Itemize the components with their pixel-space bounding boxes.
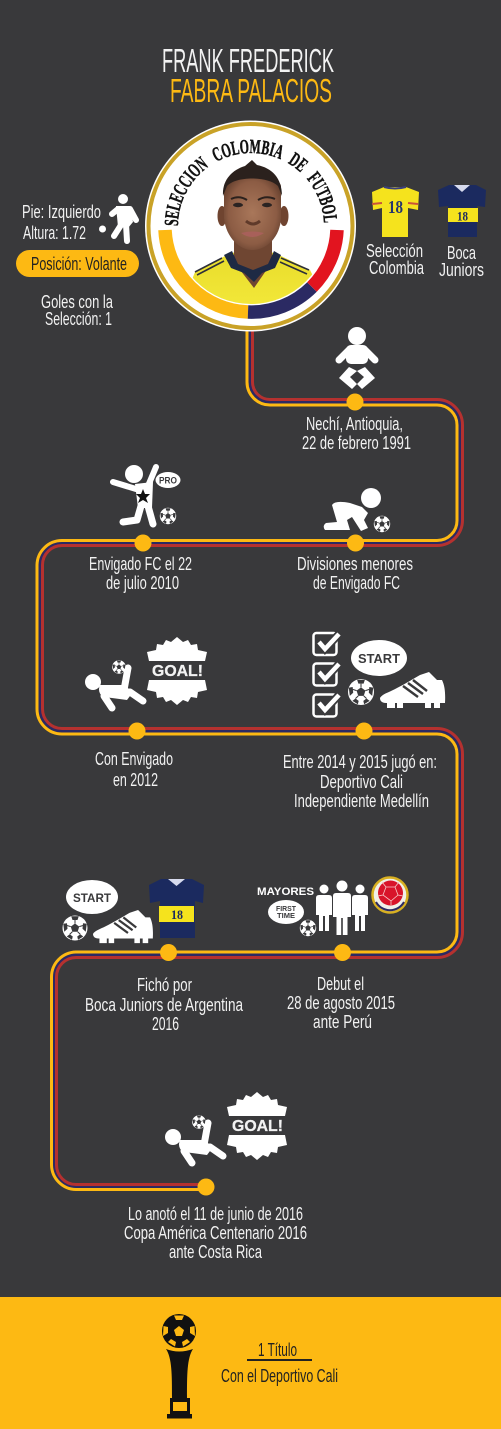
milestone dots [128, 394, 372, 1196]
portrait [192, 160, 312, 304]
text: Envigado FC: de julio 2010 [106, 573, 179, 593]
text: birth: Nechí, Antioquia, [306, 414, 403, 434]
text: birth: 22 de febrero 1991 [302, 433, 411, 453]
goals with national team: Selección: 1 [45, 309, 112, 329]
icon: crawling baby [324, 488, 390, 532]
badge text: SELECCION COLOMBIA DE FUTBOL [164, 140, 338, 226]
text: Divisiones menores: de Envigado FC [313, 573, 400, 593]
text: 2014 to 2015: Deportivo Cali [320, 772, 403, 792]
icon: start, ball, boot and Boca shirt: 18 [171, 907, 183, 922]
text: Divisiones menores [297, 554, 413, 593]
text: Copa América goal [124, 1204, 307, 1262]
icon: baby [339, 327, 375, 389]
icon: pro player [113, 465, 180, 524]
icon: senior team debut: FIRST [276, 906, 297, 913]
goals with national team: Goles con la [41, 292, 114, 312]
player stats: Pie: Izquierdo [22, 202, 101, 222]
icon: start, ball, boot and Boca shirt: START [73, 893, 111, 905]
label: Selección Colombia: Selección [366, 241, 423, 261]
icon: checklist, start, ball and boot: START [358, 652, 400, 666]
text: Divisiones menores: Divisiones menores [297, 554, 413, 574]
icon: player with ball [99, 194, 136, 241]
icon: senior team debut: TIME [277, 913, 295, 920]
text: title count [221, 1340, 338, 1386]
text: Boca Juniors signing: Fichó por [137, 975, 192, 995]
position pill [16, 250, 139, 277]
icon: pro player: PRO [159, 476, 177, 486]
panel: footer [0, 1297, 501, 1429]
tricolor arc [165, 230, 337, 312]
icon: Boca shirt [438, 185, 486, 237]
icon: start, ball, boot and Boca shirt [62, 879, 204, 943]
label: Boca Juniors: Boca [447, 243, 477, 263]
icon: checklist, start, ball and boot [314, 633, 445, 716]
text: Copa América goal: Copa América Centenario 2016 [124, 1223, 307, 1243]
icon: second bicycle kick and goal [165, 1092, 287, 1163]
title: FABRA PALACIOS [170, 72, 332, 109]
title: FRANK FREDERICK [162, 42, 334, 79]
icon: senior team debut: MAYORES [257, 886, 314, 898]
text: birth [302, 414, 411, 453]
text: Con Envigado [95, 749, 173, 790]
text: Copa América goal: Lo anotó el 11 de junio de 2016 [128, 1204, 303, 1224]
label: Selección Colombia [366, 241, 425, 278]
text: debut [287, 974, 395, 1032]
position pill: Posición: Volante [31, 254, 127, 274]
label: Selección Colombia: Colombia [369, 258, 425, 278]
text: Envigado FC [89, 554, 192, 593]
text: title count: 1 Título [258, 1340, 297, 1360]
text: 2014 to 2015: Independiente Medellín [294, 791, 429, 811]
title [162, 42, 334, 109]
text: debut: ante Perú [313, 1012, 372, 1032]
medal with portrait [145, 120, 356, 332]
text: Con Envigado: Con Envigado [95, 749, 173, 769]
icon: Boca shirt: 18 [457, 208, 468, 224]
player stats [22, 202, 101, 243]
timeline path [37, 325, 462, 1190]
text: 2014 to 2015 [283, 752, 437, 811]
text: Copa América goal: ante Costa Rica [169, 1242, 263, 1262]
text: Boca Juniors signing [85, 975, 244, 1034]
text: Boca Juniors signing: Boca Juniors de Argentina [85, 995, 244, 1015]
player stats: Altura: 1.72 [23, 223, 86, 243]
goals with national team [41, 292, 114, 329]
icon: trophy [162, 1314, 196, 1418]
icon: Colombia shirt: 18 [388, 197, 403, 217]
text: debut: Debut el [317, 974, 364, 994]
label: Boca Juniors: Juniors [439, 260, 484, 280]
text: 2014 to 2015: Entre 2014 y 2015 jugó en: [283, 752, 437, 772]
text: debut: 28 de agosto 2015 [287, 993, 395, 1013]
text: Con Envigado: en 2012 [113, 770, 158, 790]
icon: bicycle kick and goal [85, 637, 207, 708]
text: Envigado FC: Envigado FC el 22 [89, 554, 192, 574]
icon: Colombia shirt [372, 187, 419, 237]
text: title count: Con el Deportivo Cali [221, 1366, 338, 1386]
text: Boca Juniors signing: 2016 [152, 1014, 179, 1034]
label: Boca Juniors [439, 243, 484, 280]
icon: senior team debut [257, 877, 408, 936]
